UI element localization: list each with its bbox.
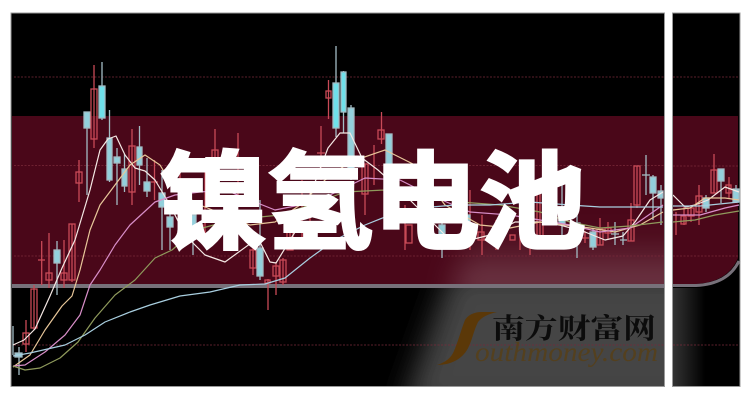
green line — [13, 190, 663, 370]
title: 镍氢电池 — [160, 145, 586, 263]
white line — [13, 133, 663, 345]
logo: southmoney watermark — [437, 307, 658, 367]
yellow line — [13, 150, 663, 367]
candlesticks: right chart — [676, 154, 739, 235]
moving average lines — [13, 133, 663, 370]
panel: right narrow chart background — [672, 13, 740, 386]
magenta line — [13, 178, 663, 366]
candlesticks: left chart — [13, 46, 663, 375]
blue line — [13, 202, 663, 356]
moving average lines: right chart — [673, 187, 739, 222]
price grid lines — [14, 77, 738, 345]
logo web address: outhmoney.com — [475, 337, 658, 367]
logo Chinese name: 南方财富网 — [492, 307, 656, 347]
icon: brown swoosh S — [437, 312, 497, 365]
